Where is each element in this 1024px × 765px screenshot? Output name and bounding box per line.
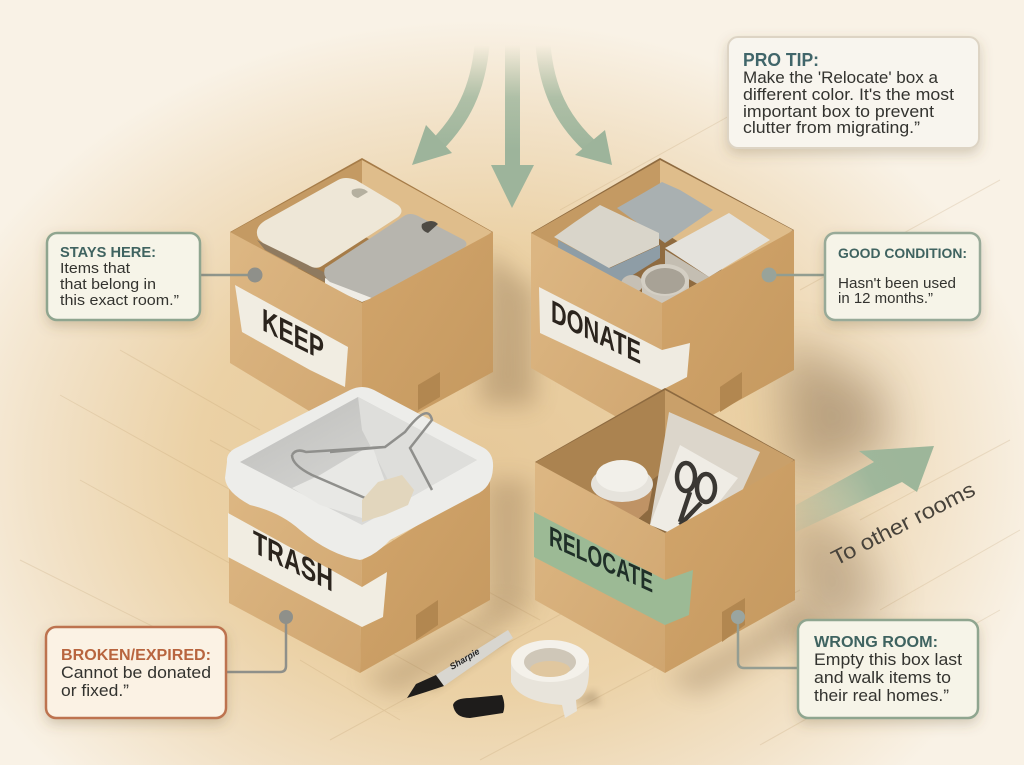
contents: coffee cup: [591, 460, 653, 522]
marker cap: [453, 695, 504, 718]
contents: cream sweater: [257, 178, 402, 268]
tape: trash label: [228, 513, 387, 627]
contents: cream sweater: [554, 205, 659, 268]
liner interior: [240, 397, 477, 525]
callout: stays here: STAYS HERE:: [60, 245, 156, 261]
connector: donate: [762, 268, 824, 282]
callout: stays here: this exact room.”: [60, 292, 179, 309]
callout: wrong room: their real homes.”: [814, 686, 949, 705]
contents: brown layer under sweater: [257, 240, 330, 285]
marker pen: [407, 630, 513, 698]
label: DONATE: DONATE: [551, 293, 641, 371]
arrow: to other rooms: [796, 446, 934, 532]
white bin liner: [225, 387, 493, 560]
contents: blue grey sweater: [617, 182, 713, 243]
callout: good condition: Hasn't been used: [838, 275, 956, 292]
callout: wrong room: Empty this box last: [814, 650, 962, 669]
connector: trash: [227, 610, 293, 672]
box front left face: [531, 233, 662, 443]
callout: pro tip: [728, 37, 979, 148]
contents: book: [650, 412, 760, 528]
box front right face: [362, 232, 493, 443]
box front left face: [230, 232, 362, 443]
box: donate: [531, 158, 794, 443]
callout: broken or expired: Cannot be donated: [61, 663, 211, 682]
crumpled white paper: [292, 445, 388, 518]
tape roll: [511, 640, 600, 718]
callout: pro tip: different color. It's the most: [743, 86, 954, 104]
callout: stays here: [47, 233, 200, 320]
connector: keep: [200, 268, 262, 282]
contents: white folded layer: [325, 278, 372, 302]
floor shadows: [360, 250, 890, 695]
box: relocate: [534, 388, 795, 673]
contents: mug: [621, 264, 689, 305]
arrow: sort into centre: [491, 45, 534, 208]
callout: stays here: that belong in: [60, 276, 156, 293]
box right face: [360, 480, 490, 673]
callout: broken or expired: or fixed.”: [61, 681, 129, 700]
box: trash: [225, 387, 493, 673]
crumpled kraft paper: [362, 475, 414, 522]
marker pen: Sharpie: [448, 646, 481, 672]
tape: keep label: [235, 285, 348, 387]
label: TRASH: TRASH: [253, 524, 333, 600]
contents: paper pad: [650, 445, 738, 533]
callout: good condition: in 12 months.”: [838, 290, 933, 307]
contents: folded stack under cream sweater: [558, 240, 660, 288]
callout: wrong room: WRONG ROOM:: [814, 634, 938, 651]
callout: wrong room: and walk items to: [814, 668, 951, 687]
contents: scissors: [677, 463, 715, 525]
callout: broken or expired: [46, 627, 226, 718]
label: KEEP: KEEP: [262, 302, 324, 369]
box: keep: [230, 158, 493, 443]
callout: stays here: Items that: [60, 260, 131, 277]
box front left face: [535, 462, 665, 673]
callout: broken or expired: BROKEN/EXPIRED:: [61, 647, 211, 664]
arrow: sort into keep: [412, 45, 482, 165]
callout: good condition: GOOD CONDITION:: [838, 246, 967, 261]
label: to other rooms: To other rooms: [827, 477, 979, 570]
contents: grey sweater: [324, 214, 466, 298]
tape: relocate label: [534, 512, 693, 625]
tape: donate label: [539, 287, 690, 390]
box front right face: [665, 460, 795, 673]
box front right face: [662, 230, 794, 443]
callout: pro tip: PRO TIP:: [743, 50, 819, 70]
contents: white shirt: [665, 213, 770, 277]
hanger: [292, 413, 432, 498]
arrow: sort into donate: [543, 45, 612, 165]
label: RELOCATE: RELOCATE: [549, 520, 653, 599]
callout: pro tip: Make the 'Relocate' box a: [743, 69, 939, 87]
callout: wrong room: [798, 620, 978, 718]
callout: pro tip: important box to prevent: [743, 103, 934, 121]
box left face: [229, 480, 362, 673]
callout: pro tip: clutter from migrating.”: [743, 119, 920, 137]
connector: relocate: [731, 610, 798, 668]
callout: good condition: [825, 233, 980, 320]
